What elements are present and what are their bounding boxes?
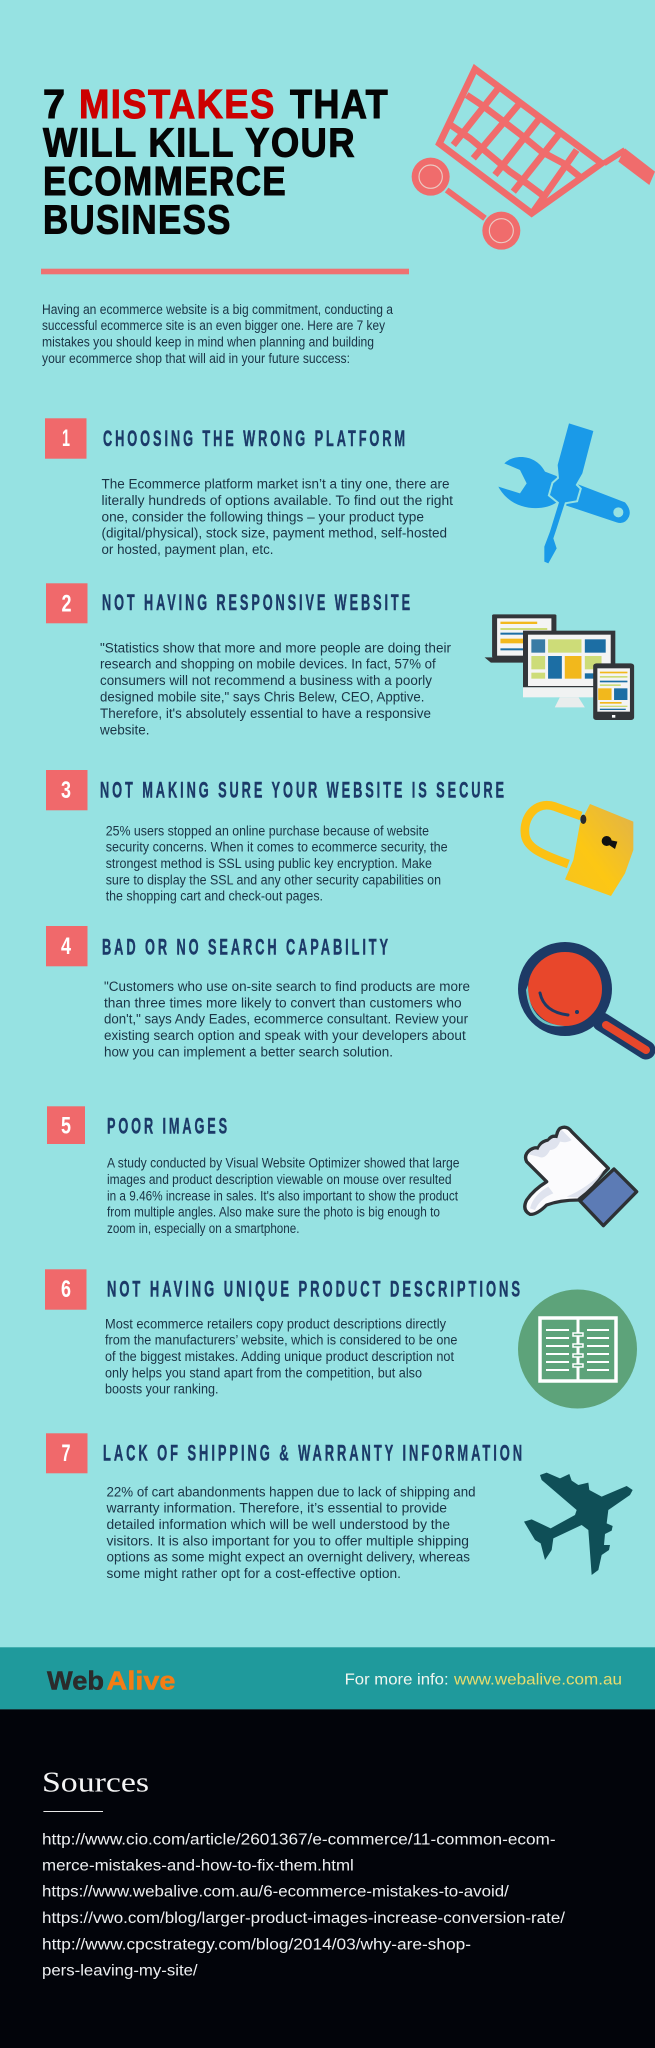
title: ECOMMERCE bbox=[43, 158, 287, 204]
icon: airplane bbox=[524, 1473, 633, 1575]
text block 4: "Customers who use on-site search to find products are more bbox=[104, 979, 470, 994]
text block 4 bbox=[104, 979, 470, 1059]
source links: https://www.webalive.com.au/6-ecommerce-mistakes-to-avoid/ bbox=[42, 1884, 510, 1901]
text block 6: from the manufacturers’ website, which is considered to be one bbox=[105, 1333, 457, 1348]
text block 2: "Statistics show that more and more people are doing their bbox=[100, 640, 451, 655]
text block 7 bbox=[105, 1484, 476, 1581]
text block 3: strongest method is SSL using public key encryption. Make bbox=[106, 856, 432, 871]
icon: shopping cart bbox=[412, 69, 655, 250]
intro text: mistakes you should keep in mind when planning and building bbox=[42, 335, 374, 350]
text block 3: security concerns. When it comes to ecommerce security, the bbox=[106, 840, 448, 855]
number badge 3 bbox=[46, 770, 88, 810]
intro text bbox=[42, 302, 393, 366]
panel: mistake 3 bbox=[46, 770, 633, 904]
number badge 6 bbox=[45, 1269, 86, 1310]
panel: mistake 6 bbox=[45, 1269, 637, 1408]
footer band bbox=[0, 1647, 655, 1709]
sources panel bbox=[0, 1709, 655, 2048]
text block 5: zoom in, especially on a smartphone. bbox=[107, 1221, 300, 1236]
panel: mistake 4 bbox=[46, 926, 646, 1059]
panel: mistake 7 bbox=[46, 1433, 633, 1581]
panel: mistake 1 bbox=[45, 418, 630, 563]
number badge 2 bbox=[46, 583, 88, 623]
intro text: successful ecommerce site is an even bigger one. Here are 7 key bbox=[42, 318, 385, 333]
icon: magnifying glass bbox=[523, 947, 646, 1050]
text block 4: how you can implement a better search solution. bbox=[104, 1044, 393, 1059]
text block 7: visitors. It is also important for you to offer multiple shipping bbox=[106, 1533, 469, 1548]
intro text: your ecommerce shop that will aid in your future success: bbox=[42, 351, 350, 366]
more info link bbox=[345, 1671, 622, 1688]
text block 7: detailed information which will be well understood by the bbox=[106, 1517, 450, 1532]
text block 7: 22% of cart abandonments happen due to lack of shipping and bbox=[106, 1484, 476, 1499]
text block 2: website. bbox=[99, 722, 150, 737]
text block 3: 25% users stopped an online purchase because of website bbox=[106, 823, 429, 838]
text block 2: consumers will not recommend a business with a poorly bbox=[100, 673, 432, 688]
source links: https://vwo.com/blog/larger-product-images-increase-conversion-rate/ bbox=[42, 1910, 566, 1927]
icon: responsive devices bbox=[485, 614, 634, 720]
text block 3 bbox=[106, 823, 448, 904]
text block 1: one, consider the following things – your product type bbox=[102, 509, 424, 524]
divider rule bbox=[41, 269, 409, 274]
text block 6: Most ecommerce retailers copy product descriptions directly bbox=[105, 1316, 446, 1331]
number badge 5 bbox=[47, 1106, 85, 1144]
text block 1: or hosted, payment plan, etc. bbox=[102, 542, 274, 557]
source links: merce-mistakes-and-how-to-fix-them.html bbox=[42, 1858, 354, 1875]
number badge 3: 3 bbox=[61, 777, 71, 804]
title bbox=[43, 81, 389, 242]
source links: http://www.cio.com/article/2601367/e-commerce/11-common-ecom- bbox=[42, 1832, 556, 1849]
title: BUSINESS bbox=[43, 196, 232, 242]
text block 7: some might rather opt for a cost-effective option. bbox=[106, 1566, 401, 1581]
number badge 4: 4 bbox=[61, 933, 71, 960]
text block 5 bbox=[107, 1156, 460, 1236]
icon: padlock bbox=[525, 804, 633, 896]
text block 4: don't," says Andy Eades, ecommerce consultant. Review your bbox=[104, 1012, 468, 1027]
text block 2: research and shopping on mobile devices. In fact, 57% of bbox=[100, 657, 436, 672]
icon: wrench and screwdriver bbox=[498, 423, 630, 563]
text block 5: A study conducted by Visual Website Optimizer showed that large bbox=[107, 1156, 460, 1171]
panel: mistake 5 bbox=[47, 1106, 637, 1236]
panel: mistake 2 bbox=[46, 583, 634, 737]
number badge 5: 5 bbox=[61, 1112, 71, 1140]
text block 2 bbox=[99, 640, 451, 737]
text block 5: in a 9.46% increase in sales. It's also important to show the product bbox=[107, 1188, 458, 1203]
text block 1: literally hundreds of options available. To find out the right bbox=[102, 493, 453, 508]
source links: http://www.cpcstrategy.com/blog/2014/03/why-are-shop- bbox=[42, 1937, 471, 1954]
intro text: Having an ecommerce website is a big commitment, conducting a bbox=[42, 302, 393, 317]
source links: pers-leaving-my-site/ bbox=[42, 1963, 198, 1980]
text block 6: only helps you stand apart from the competition, but also bbox=[105, 1365, 422, 1380]
text block 1 bbox=[102, 476, 453, 557]
heading 5: POOR IMAGES bbox=[107, 1113, 230, 1138]
text block 6: of the biggest mistakes. Adding unique product description not bbox=[105, 1349, 454, 1364]
number badge 1 bbox=[45, 418, 86, 459]
title: MISTAKES bbox=[79, 81, 276, 127]
text block 3: the shopping cart and check-out pages. bbox=[106, 889, 323, 904]
text block 1: The Ecommerce platform market isn’t a tiny one, there are bbox=[102, 476, 450, 491]
text block 2: Therefore, it's absolutely essential to have a responsive bbox=[100, 706, 431, 721]
number badge 6: 6 bbox=[61, 1276, 71, 1303]
text block 6 bbox=[105, 1316, 457, 1397]
title: THAT bbox=[290, 81, 389, 127]
heading 1: CHOOSING THE WRONG PLATFORM bbox=[103, 426, 408, 451]
text block 4: existing search option and speak with your developers about bbox=[104, 1028, 466, 1043]
text block 3: sure to display the SSL and any other security capabilities on bbox=[106, 872, 441, 887]
number badge 2: 2 bbox=[62, 590, 72, 618]
text block 2: designed mobile site," says Chris Belew, CEO, Apptive. bbox=[100, 689, 424, 704]
icon: thumbs down bbox=[525, 1127, 637, 1226]
source links bbox=[42, 1832, 566, 1980]
number badge 4 bbox=[46, 926, 88, 966]
more info link: For more info: bbox=[345, 1671, 449, 1688]
icon: book bbox=[518, 1290, 637, 1408]
heading 4: BAD OR NO SEARCH CAPABILITY bbox=[102, 935, 391, 960]
text block 7: options as some might expect an overnight delivery, whereas bbox=[106, 1550, 470, 1565]
text block 1: (digital/physical), stock size, payment method, self-hosted bbox=[102, 526, 447, 541]
text block 5: images and product description viewable on mouse over resulted bbox=[107, 1172, 452, 1187]
title: WILL KILL YOUR bbox=[43, 120, 356, 166]
number badge 7 bbox=[46, 1433, 88, 1473]
WebAlive logo bbox=[47, 1665, 176, 1695]
title: 7 bbox=[43, 81, 66, 127]
number badge 1: 1 bbox=[62, 425, 70, 452]
WebAlive logo: Alive bbox=[106, 1665, 176, 1695]
text block 4: than three times more likely to convert than customers who bbox=[104, 995, 462, 1010]
number badge 7: 7 bbox=[62, 1440, 70, 1467]
text block 5: from multiple angles. Also make sure the photo is big enough to bbox=[107, 1205, 440, 1220]
sources heading: Sources bbox=[42, 1768, 149, 1799]
WebAlive logo: Web bbox=[47, 1665, 104, 1695]
text block 7: warranty information. Therefore, it’s essential to provide bbox=[105, 1501, 447, 1516]
more info link: www.webalive.com.au bbox=[453, 1671, 622, 1688]
heading 2: NOT HAVING RESPONSIVE WEBSITE bbox=[102, 590, 413, 615]
text block 6: boosts your ranking. bbox=[105, 1382, 218, 1397]
